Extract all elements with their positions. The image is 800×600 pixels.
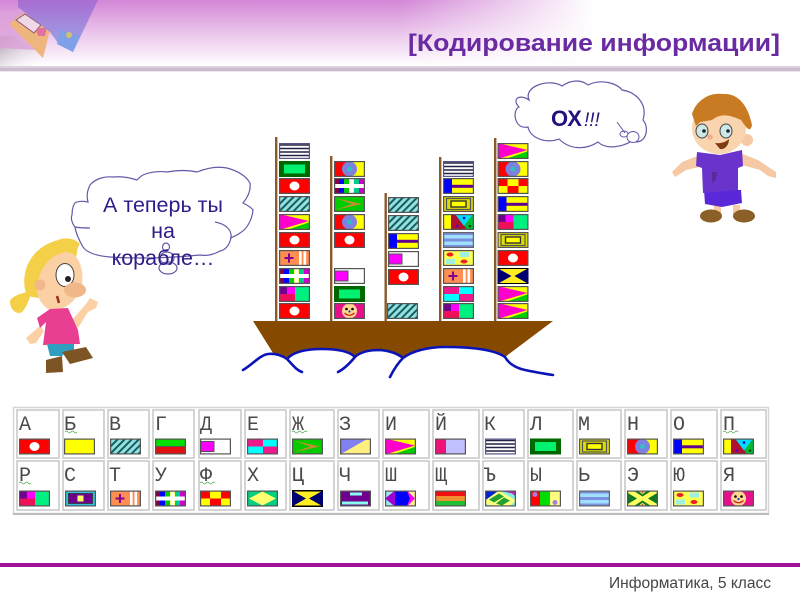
flag column 3 [387,197,419,319]
row 1 letters: К [484,414,496,437]
row 1 letters: Ж [292,414,304,437]
row 2 letters: Я [723,465,735,488]
waves [243,347,553,377]
arm and hand [72,298,98,328]
header background [0,0,800,72]
ear [741,134,753,146]
footer rule [0,563,800,567]
flag column 4 [443,161,474,319]
speech cloud: girl [71,167,253,274]
row 2 letters: У [155,465,167,488]
row 2 letters: Щ [435,465,447,488]
row 2 letters: Ь [578,465,590,488]
character: boy [672,94,776,222]
row 2 letters: Р [19,465,31,488]
ponytail [10,292,30,313]
row 2 letters: С [64,465,76,488]
row 2 letters: Ы [530,465,542,488]
mast 5 [494,138,496,322]
eyes [696,124,708,138]
row 2 letters: Э [627,465,639,488]
row 2 letters: Ч [339,465,351,488]
dress [37,308,80,345]
mast 3 [384,193,387,322]
legs [714,205,740,215]
ear [34,280,46,290]
row 1 letters: Й [435,413,447,437]
icon: folders and floppy decoration [0,0,98,66]
shorts [47,344,74,356]
row 1 letters: А [19,414,31,437]
head [37,252,82,310]
flag column 5 [498,143,528,319]
title: [Кодирование информации] [408,30,780,57]
left hand [26,326,44,344]
mast 1 [275,137,277,322]
flag column 2 [334,161,365,319]
row 1 flags [19,438,754,454]
row 1 letters: М [578,414,590,437]
mast 2 [330,156,332,322]
arms [672,155,704,177]
row 1 letters: Л [529,414,542,437]
row 1 letters: Г [155,414,167,437]
panel: flag alphabet table [13,408,769,515]
row 1 letters: И [385,414,397,437]
hair [692,94,752,129]
shoes [46,356,63,373]
text: girl speech: на [151,219,175,243]
row 2 letters: Ф [200,465,212,488]
text: boy speech: ОХ!!! [551,106,601,131]
mouth [715,139,729,149]
hull [253,321,553,358]
row 2 letters: Х [247,465,259,488]
row 2 letters: Ц [292,465,304,488]
row 1 letters: З [339,414,351,437]
spellcheck squiggles [19,431,738,484]
character: girl [10,238,98,373]
row 2 letters: Т [109,465,121,488]
row 1 letters: Н [627,414,639,437]
text: girl speech: А теперь ты [103,193,223,217]
row 1 letters: Е [247,414,259,437]
row 1 letters: Д [200,414,212,437]
row 2 letters: Ю [673,465,685,488]
shirt [696,150,743,193]
row 2 cells [17,461,766,510]
head [692,102,746,154]
eye [56,264,74,286]
footer text: Информатика, 5 класс [609,575,771,592]
row 1 letters: Б [64,414,76,437]
nose [707,134,713,140]
row 2 letters: Ш [385,465,397,488]
row 1 cells [17,410,766,458]
row 2 letters: Ъ [484,465,496,488]
hair [24,238,80,298]
row 2 flags [19,490,754,506]
text: girl speech: корабле… [112,246,214,270]
flag column 1 [279,143,310,319]
row 1 letters: П [723,414,735,437]
row 2 letters [19,465,735,488]
shorts [704,190,742,207]
mast 4 [439,157,441,322]
row 1 letters [19,413,735,437]
row 1 letters: О [673,414,685,437]
speech cloud: boy [515,81,646,148]
nose [64,282,86,298]
ship [243,137,553,377]
row 1 letters: В [109,414,121,437]
shoes [700,210,722,222]
